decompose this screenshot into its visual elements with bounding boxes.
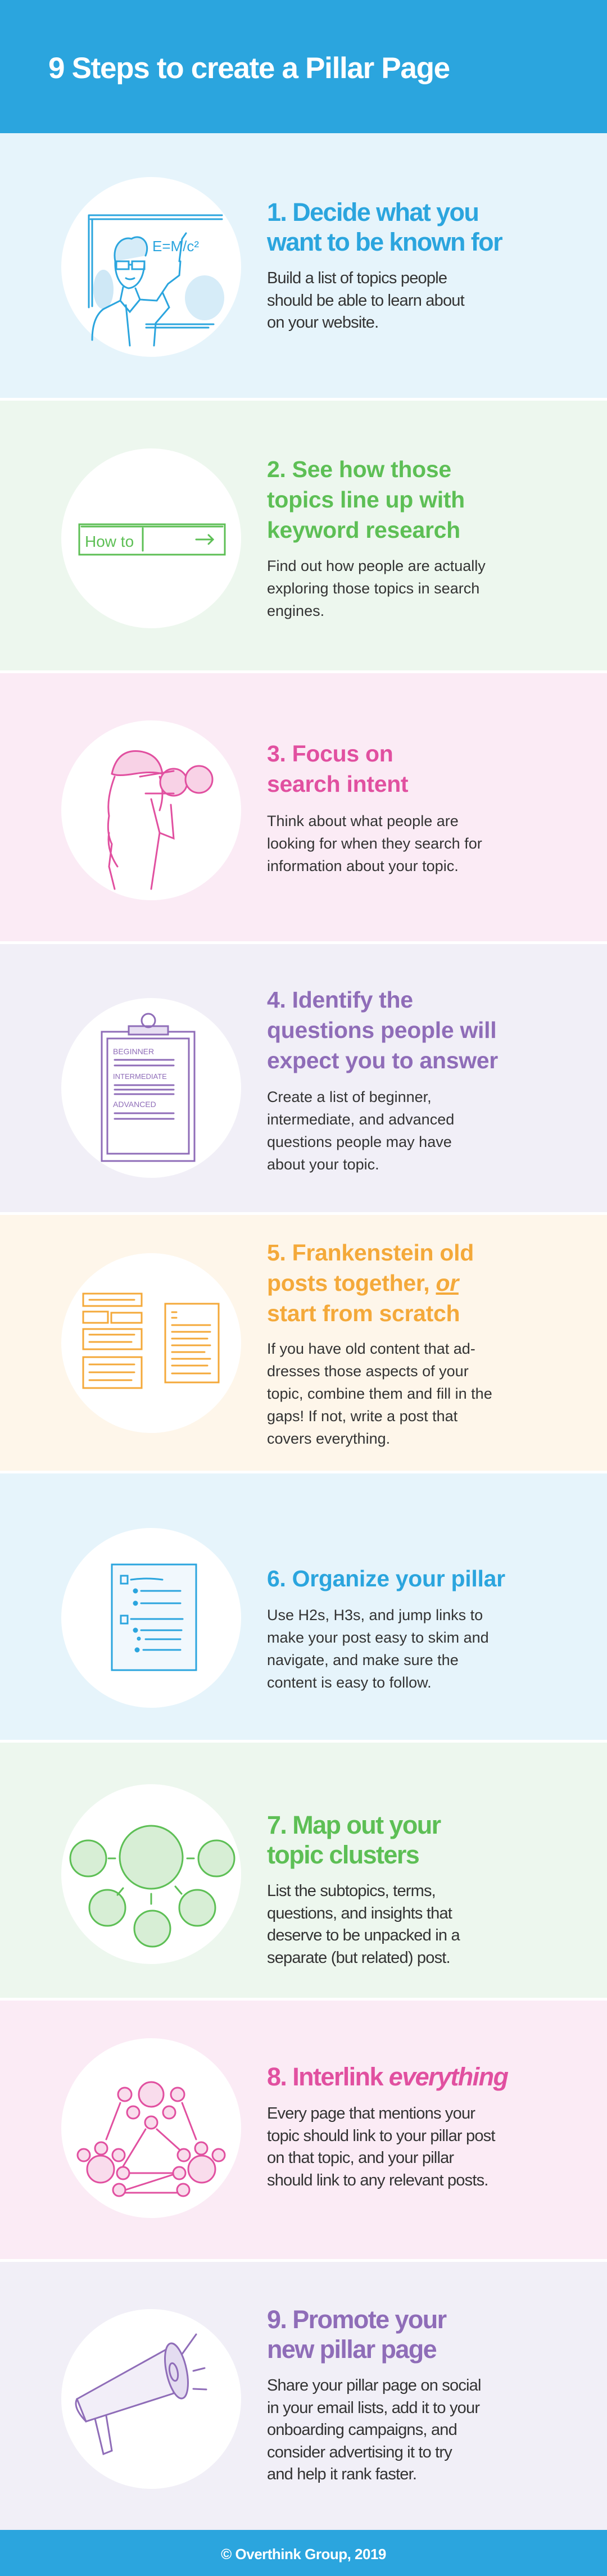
heading: step 4: questions people will: [267, 1017, 496, 1043]
panel: step 1: [0, 133, 607, 398]
text: step 9: consider advertising it to try: [267, 2443, 452, 2461]
heading: step 7: [267, 1811, 441, 1869]
text: step 7: questions, and insights that: [267, 1904, 452, 1922]
text: step 7: deserve to be unpacked in a: [267, 1926, 460, 1944]
text: step 3: information about your topic.: [267, 858, 459, 874]
title: 9 Steps to create a Pillar Page: [48, 52, 450, 85]
heading: step 2: [267, 456, 465, 543]
text: step 4: [267, 1089, 454, 1173]
text: step 8: should link to any relevant posts.: [267, 2171, 488, 2189]
text: step 5: [267, 1340, 492, 1447]
heading: step 3: 3. Focus on: [267, 741, 393, 767]
text: step 6: [267, 1607, 489, 1691]
panel: step 3: [0, 673, 607, 941]
heading: step 5: posts together, or: [267, 1270, 459, 1296]
icon: clipboard: BEGINNER: [113, 1047, 154, 1056]
text: step 3: [267, 813, 482, 874]
text: step 8: topic should link to your pillar post: [267, 2126, 495, 2144]
text: step 2: engines.: [267, 602, 324, 619]
text: step 5: covers everything.: [267, 1430, 390, 1447]
text: step 9: and help it rank faster.: [267, 2465, 416, 2483]
heading: step 1: [266, 198, 502, 256]
heading: step 9: new pillar page: [267, 2335, 436, 2364]
text: step 7: [267, 1882, 460, 1967]
text: step 4: about your topic.: [267, 1156, 379, 1173]
text: step 9: Share your pillar page on social: [267, 2377, 481, 2394]
heading: step 8: 8. Interlink everything: [267, 2062, 508, 2091]
text: step 5: If you have old content that ad-: [267, 1340, 475, 1357]
text: step 8: [267, 2105, 496, 2189]
text: step 5: gaps! If not, write a post that: [267, 1408, 457, 1425]
heading: step 2: topics line up with: [267, 487, 465, 513]
heading: step 1: 1. Decide what you: [267, 198, 478, 226]
text: step 1: Build a list of topics people: [267, 269, 447, 287]
text: step 1: on your website.: [267, 314, 378, 332]
icon: organized document: [61, 1528, 241, 1708]
text: step 8: on that topic, and your pillar: [267, 2149, 454, 2167]
text: step 4: questions people may have: [267, 1133, 452, 1150]
panel: step 6: [0, 1473, 607, 1740]
text: step 6: make your post easy to skim and: [267, 1629, 489, 1646]
icon: topic cluster circles: [61, 1784, 241, 1964]
header: [0, 0, 607, 133]
panel: step 2: [0, 401, 607, 670]
panel: step 9: [0, 2262, 607, 2530]
icon: person with binoculars: [61, 720, 241, 900]
heading: step 9: [267, 2305, 446, 2364]
heading: step 7: topic clusters: [267, 1840, 419, 1869]
text: step 1: [267, 269, 464, 332]
text: step 3: Think about what people are: [267, 813, 459, 829]
text: step 2: exploring those topics in search: [267, 580, 479, 597]
text: step 4: Create a list of beginner,: [267, 1089, 432, 1105]
icon: clipboard: INTERMEDIATE: [113, 1072, 167, 1081]
text: step 1: should be able to learn about: [267, 291, 464, 309]
text: step 6: navigate, and make sure the: [267, 1652, 459, 1668]
heading: step 5: 5. Frankenstein old: [267, 1240, 474, 1266]
heading: step 2: 2. See how those: [267, 456, 451, 482]
heading: step 4: 4. Identify the: [267, 987, 413, 1013]
text: step 5: dresses those aspects of your: [267, 1363, 469, 1380]
heading: step 1: want to be known for: [267, 228, 502, 256]
heading: step 9: 9. Promote your: [267, 2305, 446, 2334]
text: step 7: List the subtopics, terms,: [267, 1882, 436, 1900]
heading: step 4: [267, 987, 498, 1073]
icon: clipboard: [61, 998, 241, 1178]
text: step 6: content is easy to follow.: [267, 1674, 432, 1691]
text: step 7: separate (but related) post.: [267, 1949, 450, 1967]
icon: clipboard: ADVANCED: [113, 1100, 156, 1109]
footer: [0, 2530, 607, 2576]
panel: step 5: [0, 1215, 607, 1471]
text: step 2: Find out how people are actually: [267, 557, 486, 574]
text: step 6: Use H2s, H3s, and jump links to: [267, 1607, 483, 1623]
heading: step 7: 7. Map out your: [267, 1811, 441, 1839]
text: step 2: [267, 557, 486, 619]
text: step 5: topic, combine them and fill in the: [267, 1385, 492, 1402]
text: step 8: Every page that mentions your: [267, 2105, 475, 2123]
text: step 9: [267, 2377, 481, 2483]
icon: paper pieces and document: [61, 1253, 241, 1433]
heading: step 2: keyword research: [267, 517, 460, 543]
icon: search box: How to: [85, 533, 134, 550]
panel: step 7: [0, 1743, 607, 1998]
icon: megaphone: [61, 2309, 241, 2489]
icon: teacher at blackboard: E=M/c²: [152, 238, 199, 255]
text: step 9: in your email lists, add it to your: [267, 2398, 479, 2416]
text: step 4: intermediate, and advanced: [267, 1111, 454, 1128]
heading: step 3: [267, 741, 408, 797]
heading: step 3: search intent: [267, 771, 408, 797]
text: step 9: onboarding campaigns, and: [267, 2421, 457, 2439]
icon: search box: [61, 448, 241, 628]
text: step 3: looking for when they search for: [267, 835, 482, 852]
icon: teacher at blackboard: [61, 177, 241, 357]
text: copyright: © Overthink Group, 2019: [221, 2546, 386, 2563]
heading: step 5: [267, 1240, 474, 1326]
panel: step 4: [0, 944, 607, 1212]
heading: step 6: 6. Organize your pillar: [267, 1566, 505, 1591]
panel: step 8: [0, 2001, 607, 2259]
icon: interlinked network: [61, 2038, 241, 2218]
heading: step 5: start from scratch: [267, 1300, 460, 1326]
heading: step 4: expect you to answer: [267, 1047, 498, 1073]
